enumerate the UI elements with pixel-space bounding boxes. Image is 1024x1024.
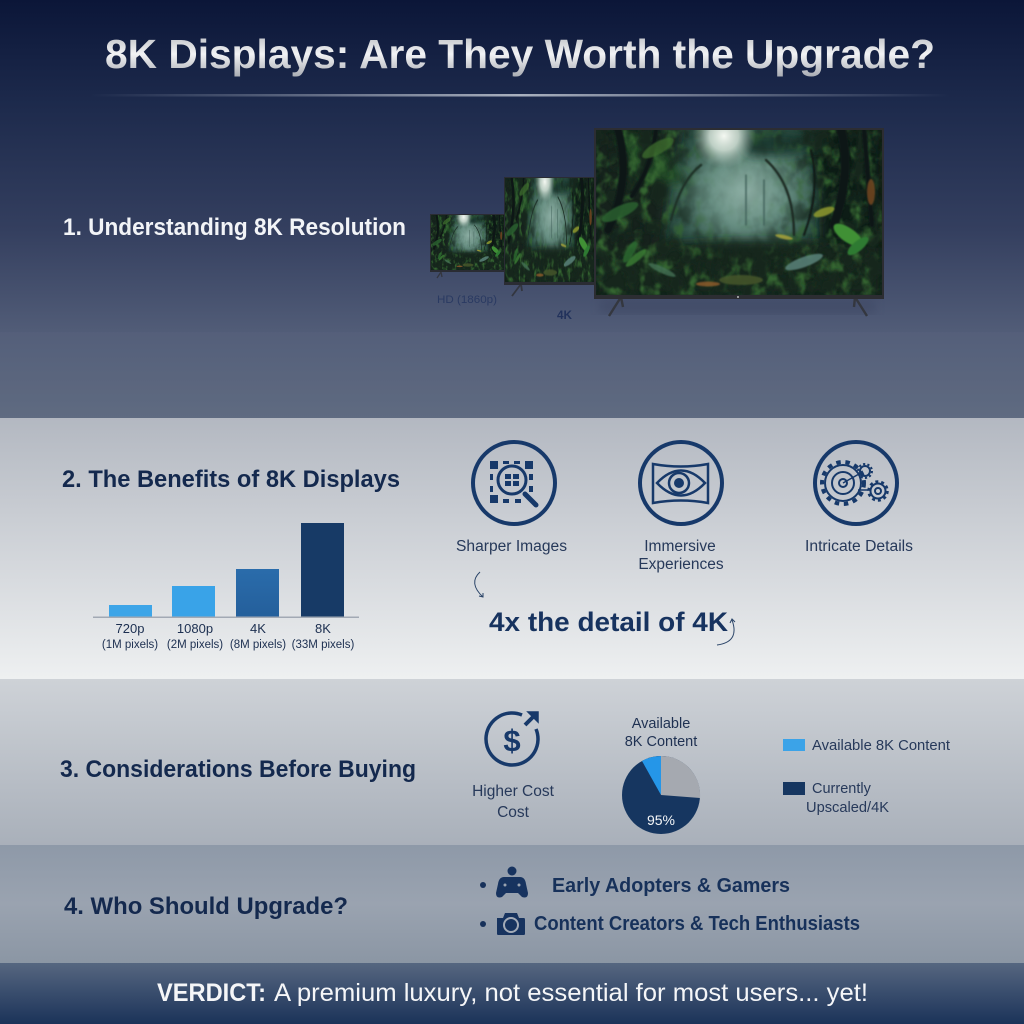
icon: immersive experiences	[640, 442, 722, 524]
bar chart: 8K	[315, 621, 331, 636]
heading: benefits: 2. The Benefits of 8K Displays	[62, 466, 400, 493]
text: early adopters: Early Adopters & Gamers	[552, 875, 790, 897]
heading: understanding 8K resolution: 1. Understanding 8K Resolution	[63, 214, 406, 241]
label: experiences: Experiences	[638, 556, 724, 573]
bar chart	[93, 523, 359, 651]
callout: 4x detail: 4x the detail of 4K	[489, 607, 729, 637]
bar chart: 4K	[250, 621, 266, 636]
bar chart: (33M pixels)	[292, 639, 354, 651]
legend: Currently	[812, 781, 872, 797]
verdict banner: A premium luxury, not essential for most users... yet!	[274, 979, 868, 1007]
bar chart: (1M pixels)	[102, 639, 158, 651]
icon: higher cost	[486, 712, 538, 765]
legend: Upscaled/4K	[806, 800, 889, 816]
bar chart: 720p	[116, 621, 144, 636]
label: intricate details: Intricate Details	[805, 538, 913, 555]
bar chart: 1080p	[177, 621, 213, 636]
small TV	[430, 214, 505, 278]
icon: intricate details	[815, 442, 897, 524]
icon: higher cost: $	[503, 723, 521, 758]
label: 4K: 4K	[557, 308, 572, 322]
label: cost: Cost	[497, 804, 530, 821]
large TV	[594, 128, 884, 316]
TV comparison	[430, 128, 884, 316]
icon: sharper images	[473, 442, 555, 524]
bar chart: (8M pixels)	[230, 639, 286, 651]
pie chart	[622, 756, 700, 834]
heading: considerations: 3. Considerations Before Buying	[60, 756, 416, 783]
pie chart: 95%	[647, 812, 675, 828]
bullet: content creators	[480, 921, 486, 927]
pie chart title: 8K Content	[625, 734, 697, 750]
label: immersive experiences: Immersive	[644, 538, 716, 555]
legend: Available 8K Content	[812, 738, 950, 754]
pie chart title: Available	[632, 716, 690, 732]
icon: gamepad	[496, 866, 528, 898]
text: content creators: Content Creators & Tech Enthusiasts	[534, 913, 860, 935]
medium TV	[504, 177, 595, 296]
label: higher cost: Higher Cost	[472, 783, 555, 800]
heading: who should upgrade: 4. Who Should Upgrade?	[64, 893, 348, 920]
title: 8K Displays: Are They Worth the Upgrade?	[105, 31, 935, 77]
label: sharper images: Sharper Images	[456, 538, 567, 555]
legend	[783, 738, 950, 816]
pie chart title	[625, 716, 697, 750]
arrow: curved left	[475, 572, 483, 597]
arrow: curved right	[717, 619, 735, 645]
label: HD: HD (1860p)	[437, 294, 497, 306]
icon: camera	[497, 913, 525, 935]
bullet: early adopters	[480, 882, 486, 888]
bar chart: (2M pixels)	[167, 639, 223, 651]
verdict banner: VERDICT:	[157, 979, 266, 1007]
